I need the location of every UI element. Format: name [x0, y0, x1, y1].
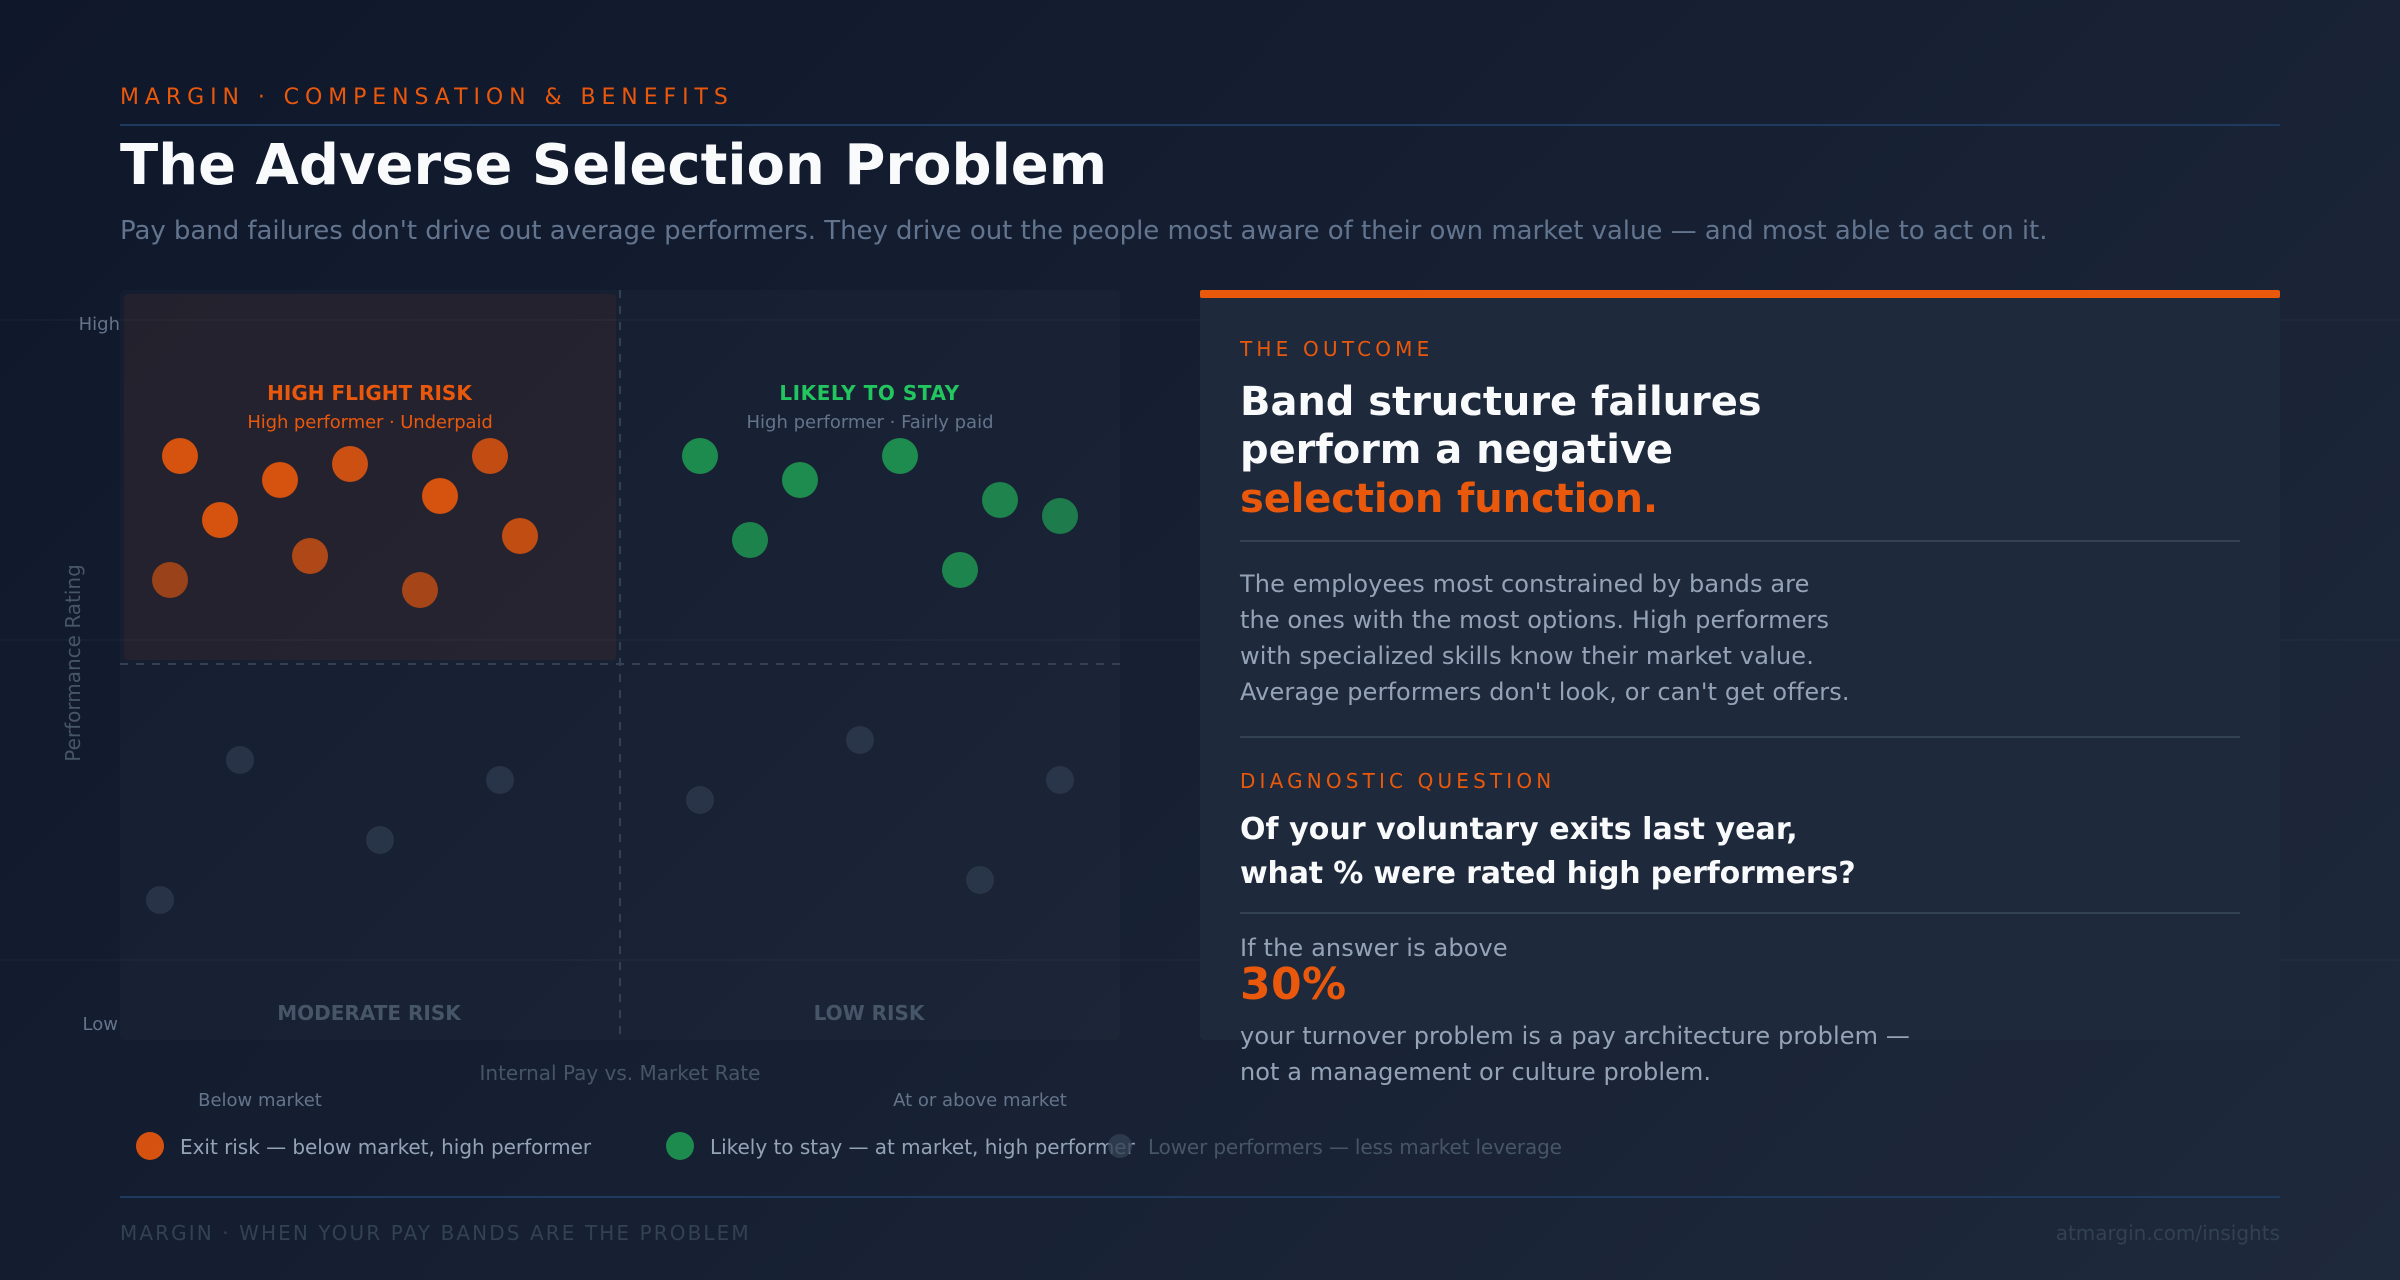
- diagnostic question: what % were rated high performers?: [1240, 856, 1855, 891]
- y axis labels: High: [79, 314, 120, 335]
- panel: the outcome: [1200, 290, 2280, 1086]
- x axis labels: [198, 1061, 1067, 1111]
- legend: [136, 1132, 1562, 1160]
- title: The Adverse Selection Problem: [120, 133, 1107, 198]
- diagnostic question: Of your voluntary exits last year,: [1240, 812, 1798, 847]
- outcome heading: Band structure failures: [1240, 379, 1762, 425]
- quadrant: high flight risk: [124, 294, 616, 660]
- quadrant: likely to stay: High performer · Fairly paid: [746, 412, 994, 433]
- quadrant: low risk: [686, 726, 1074, 1025]
- outcome body: The employees most constrained by bands are: [1239, 570, 1810, 598]
- y axis labels: Performance Rating: [61, 564, 85, 762]
- footer: atmargin.com/insights: [2056, 1221, 2280, 1245]
- diagnostic label: DIAGNOSTIC QUESTION: [1240, 769, 1555, 793]
- quadrant: moderate risk: [146, 746, 514, 1025]
- stat: 30%: 30%: [1240, 959, 1347, 1010]
- footer: MARGIN · WHEN YOUR PAY BANDS ARE THE PROBLEM: [120, 1221, 751, 1245]
- footer: [120, 1196, 2280, 1245]
- quadrant: low risk: LOW RISK: [814, 1001, 926, 1025]
- legend item: exit risk: Exit risk — below market, high performer: [180, 1135, 592, 1159]
- quadrant: high flight risk: HIGH FLIGHT RISK: [267, 381, 473, 405]
- outcome heading: selection function.: [1240, 476, 1658, 522]
- conclusion text: not a management or culture problem.: [1240, 1058, 1711, 1086]
- outcome body: the ones with the most options. High performers: [1240, 606, 1829, 634]
- y axis labels: [61, 314, 120, 1035]
- quadrant: likely to stay: LIKELY TO STAY: [779, 381, 960, 405]
- header: [120, 85, 2280, 246]
- quadrant: high flight risk: High performer · Underpaid: [247, 412, 493, 433]
- x axis labels: At or above market: [893, 1090, 1067, 1111]
- quadrant: moderate risk: MODERATE RISK: [277, 1001, 462, 1025]
- outcome label: THE OUTCOME: [1239, 337, 1433, 361]
- x axis labels: Internal Pay vs. Market Rate: [480, 1061, 760, 1085]
- y axis labels: Low: [83, 1014, 118, 1035]
- outcome body: with specialized skills know their market value.: [1240, 642, 1814, 670]
- outcome body: Average performers don't look, or can't get offers.: [1240, 678, 1850, 706]
- legend item: lower performers: Lower performers — less market leverage: [1148, 1135, 1562, 1159]
- subtitle: Pay band failures don't drive out average performers. They drive out the people most aware of their own market value — and most able to act on it.: [120, 216, 2047, 246]
- threshold text: If the answer is above: [1240, 934, 1508, 962]
- eyebrow: MARGIN · COMPENSATION & BENEFITS: [120, 85, 734, 110]
- outcome heading: perform a negative: [1240, 427, 1673, 473]
- conclusion text: your turnover problem is a pay architecture problem —: [1240, 1022, 1910, 1050]
- quadrant: likely to stay: [682, 381, 1078, 588]
- quadrant chart: [120, 290, 1120, 1040]
- legend item: likely to stay: Likely to stay — at market, high performer: [710, 1135, 1136, 1159]
- x axis labels: Below market: [198, 1090, 322, 1111]
